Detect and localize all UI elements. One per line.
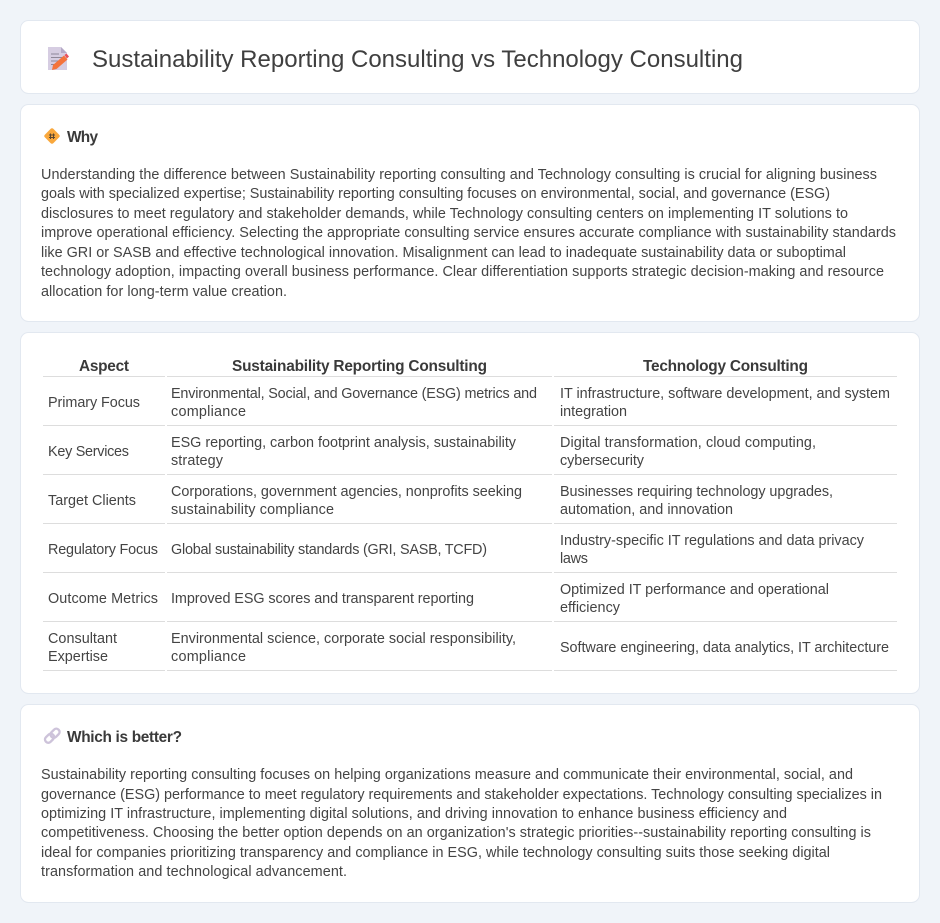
text block: which is better paragraph [41,767,882,880]
row: outcome metrics: Optimized IT performance and operational [560,582,829,598]
text block: which is better paragraph: transformation and technological advancement. [41,864,347,880]
text block: which is better paragraph: ideal for companies prioritizing transparency and compliance in ESG, while technology consulting suits those seeking digital [41,845,830,861]
row: key services: cybersecurity [560,453,645,469]
row: consultant expertise: Consultant [48,631,117,647]
row: key services: strategy [171,453,224,469]
row: target clients: Businesses requiring technology upgrades, [560,484,833,500]
row: primary focus: integration [560,404,627,420]
text block: why paragraph: goals with specialized expertise; Sustainability reporting consulting focuses on environmental, social, and governance (ESG) [41,186,830,202]
table header row: Aspect [79,358,129,375]
row: outcome metrics: Outcome Metrics [48,591,158,607]
text block: why paragraph: disclosures to meet regulatory and stakeholder demands, while Technology consulting centers on implementing IT solutions to [41,206,848,222]
row: regulatory focus: Industry-specific IT regulations and data privacy [560,533,865,549]
text block: why paragraph [41,167,896,300]
row: key services: ESG reporting, carbon footprint analysis, sustainability [171,435,517,451]
row: primary focus: Environmental, Social, and Governance (ESG) metrics and [171,386,537,402]
row: regulatory focus: laws [560,551,588,567]
text block: which is better paragraph: Sustainability reporting consulting focuses on helping organizations measure and communicate their environmental, social, and [41,767,853,783]
row: key services: Digital transformation, cloud computing, [560,435,816,451]
row: target clients: automation, and innovation [560,502,733,518]
row: consultant expertise: Software engineering, data analytics, IT architecture [560,640,889,656]
row: key services [48,435,816,469]
text block: which is better paragraph: governance (ESG) performance to meet regulatory requirements and stakeholder expectations. Technology consulting specializes in [41,787,882,803]
text block: why paragraph: improve operational efficiency. Selecting the appropriate consulting service ensures accurate compliance with sustainability standards [41,225,896,241]
row: consultant expertise [48,631,889,665]
heading: which is better: Which is better? [67,729,182,746]
row: target clients: Target Clients [48,493,136,509]
panel: why [20,104,920,322]
text block: which is better paragraph: competitiveness. Choosing the better option depends on an organization's strategic priorities--sustainability reporting consulting is [41,825,871,841]
row: regulatory focus: Regulatory Focus [48,542,158,558]
row: outcome metrics: efficiency [560,600,621,616]
row: target clients: Corporations, government agencies, nonprofits seeking [171,484,522,500]
row: target clients [48,484,833,518]
text block: why paragraph: allocation for long-term value creation. [41,284,287,300]
row: consultant expertise: compliance [171,649,246,665]
row: regulatory focus: Global sustainability standards (GRI, SASB, TCFD) [171,542,487,558]
panel: which is better [20,704,920,902]
icon: chain link [44,727,61,744]
row: primary focus: compliance [171,404,246,420]
row: consultant expertise: Environmental science, corporate social responsibility, [171,631,516,647]
table header row: Technology Consulting [643,358,808,375]
table header row [79,358,808,375]
text block: which is better paragraph: optimizing IT infrastructure, implementing digital solutions, and driving innovation to enhance business efficiency and [41,806,787,822]
icon: memo with pencil [48,47,69,70]
row: outcome metrics [48,582,829,616]
row: primary focus [48,386,890,420]
row: regulatory focus [48,533,865,567]
row: key services: Key Services [48,444,129,460]
title: Sustainability Reporting Consulting vs Technology Consulting [92,46,743,73]
table header row: Sustainability Reporting Consulting [232,358,487,375]
icon: orange diamond sign [44,128,60,144]
row: consultant expertise: Expertise [48,649,108,665]
row: primary focus: IT infrastructure, software development, and system [560,386,890,402]
heading: why: Why [67,129,98,146]
row: outcome metrics: Improved ESG scores and transparent reporting [171,591,474,607]
row: target clients: sustainability compliance [171,502,334,518]
panel: title card [20,20,920,94]
text block: why paragraph: like GRI or SASB and effective technological innovation. Misalignment can lead to inadequate sustainability data or suboptimal [41,245,846,261]
text block: why paragraph: Understanding the difference between Sustainability reporting consulting and Technology consulting is crucial for aligning business [41,167,877,183]
panel: comparison table [20,332,920,694]
text block: why paragraph: technology adoption, impacting overall business performance. Clear differentiation supports strategic decision-making and resource [41,264,884,280]
row: primary focus: Primary Focus [48,395,140,411]
